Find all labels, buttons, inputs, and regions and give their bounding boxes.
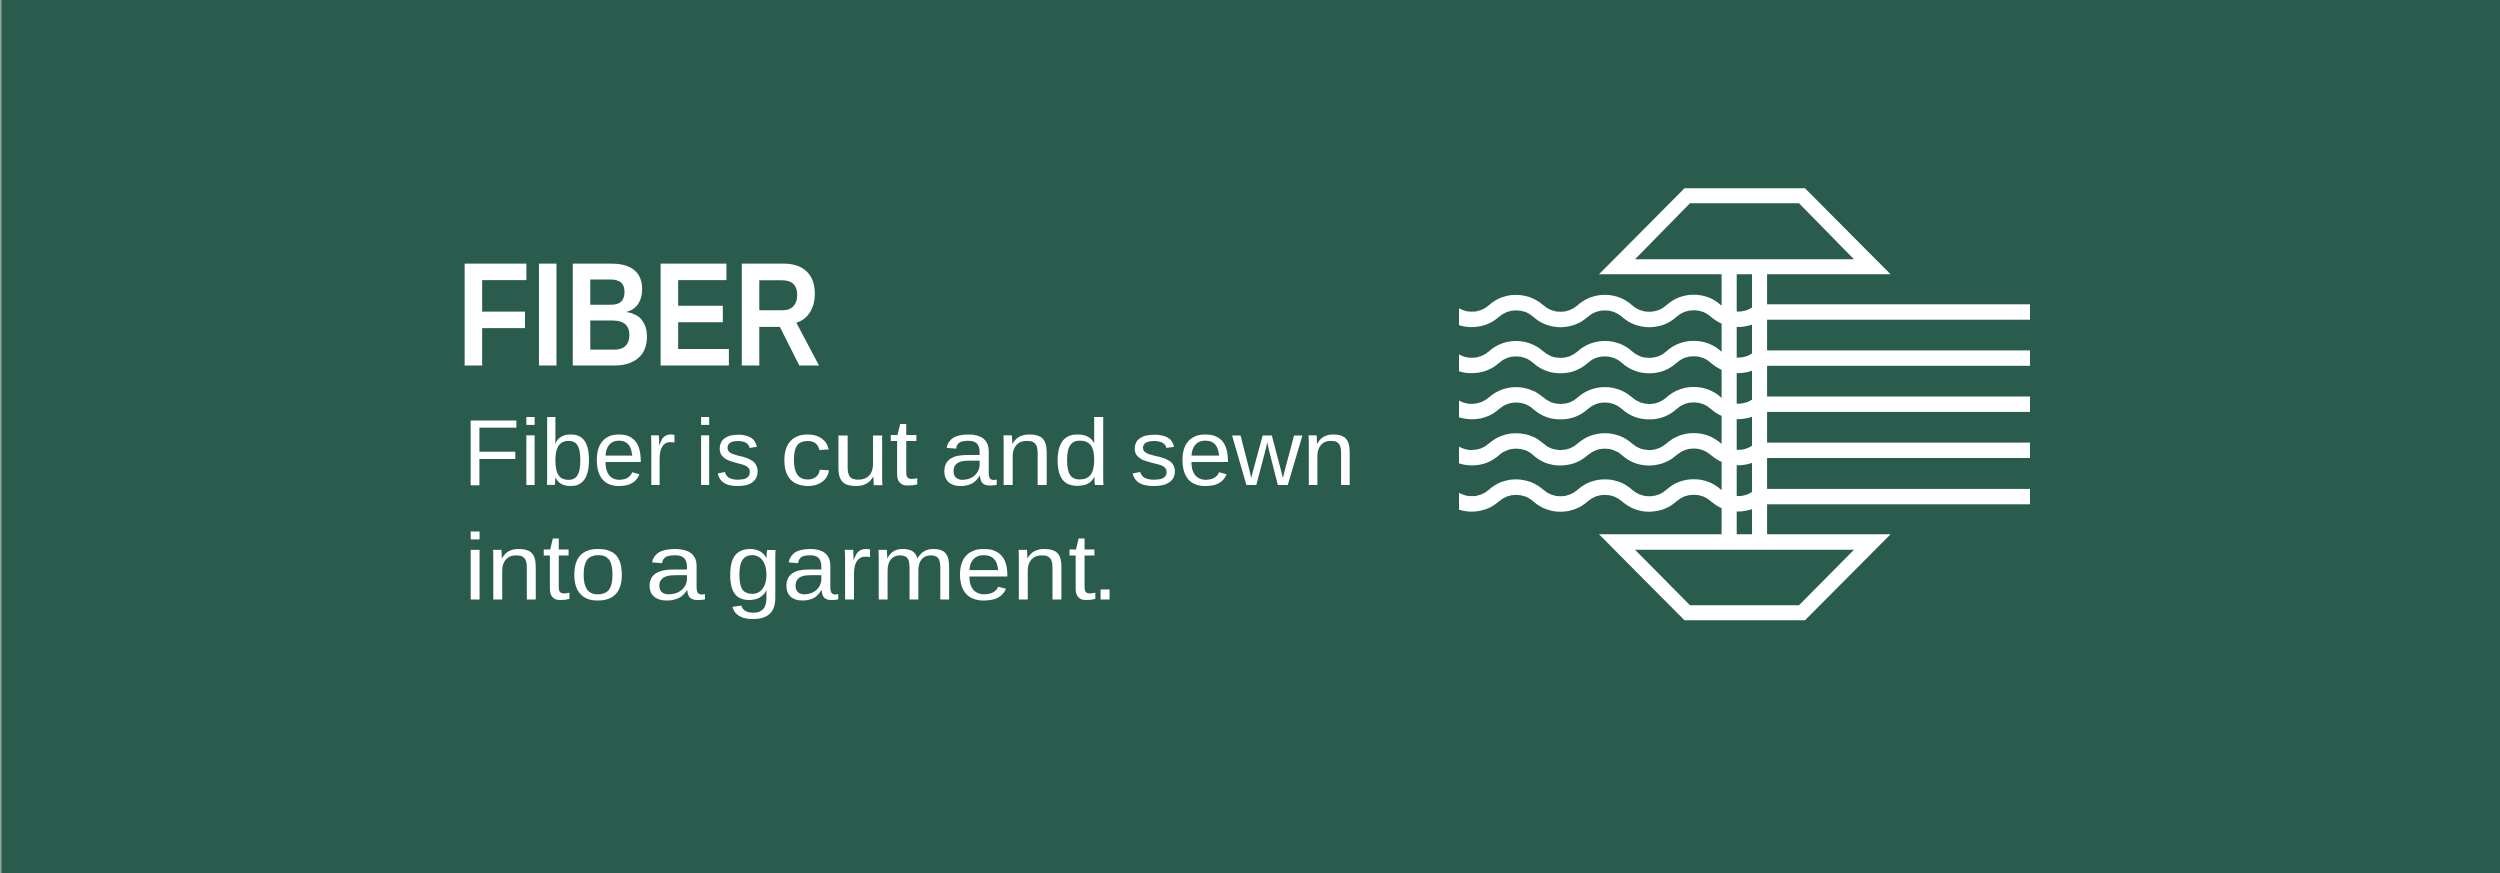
- heading: FIBER: FIBER: [456, 232, 822, 398]
- text block: description: [463, 400, 1356, 620]
- icon: fiber threads between two spools: [1450, 188, 2030, 620]
- text block: description: and: [940, 400, 1110, 505]
- vertical spindle bars: [1722, 274, 1767, 535]
- text block: description: a: [645, 514, 706, 620]
- text block: description: sewn: [1130, 400, 1356, 505]
- text block: description: .: [1092, 514, 1118, 620]
- wavy fibers: [1450, 303, 1760, 504]
- text block: description: cut: [780, 400, 918, 505]
- text block: description: garment: [726, 514, 1096, 620]
- text block: description: into: [464, 514, 626, 620]
- spool bottom: [1599, 534, 1891, 620]
- text block: description: is: [695, 400, 761, 505]
- text block: description: Fiber: [463, 400, 676, 505]
- spool top: [1599, 188, 1891, 274]
- straight threads: [1767, 304, 2030, 504]
